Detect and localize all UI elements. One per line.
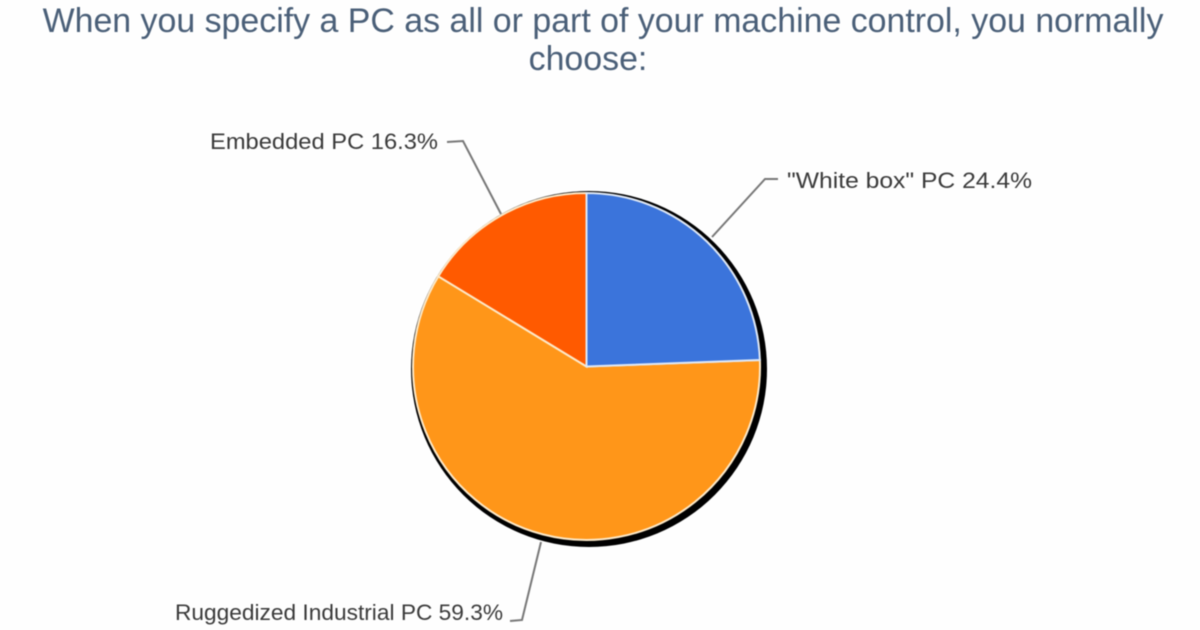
pie shadow: [411, 191, 767, 547]
leader line: Ruggedized Industrial PC: [510, 542, 541, 621]
leader line: White box PC: [712, 179, 778, 237]
slice: White box PC: [586, 193, 760, 366]
label: Ruggedized Industrial PC: Ruggedized Industrial PC 59.3%: [175, 600, 503, 625]
title: [42, 2, 1164, 78]
slice: Ruggedized Industrial PC: [413, 276, 760, 540]
title: When you specify a PC as all or part of your machine control, you normally: [43, 2, 1163, 40]
label: White box PC: "White box" PC 24.4%: [787, 168, 1032, 193]
label: Embedded PC: Embedded PC 16.3%: [210, 129, 438, 154]
leader line: Embedded PC: [447, 141, 501, 214]
slice: Embedded PC: [438, 193, 586, 366]
title: choose:: [529, 40, 647, 78]
